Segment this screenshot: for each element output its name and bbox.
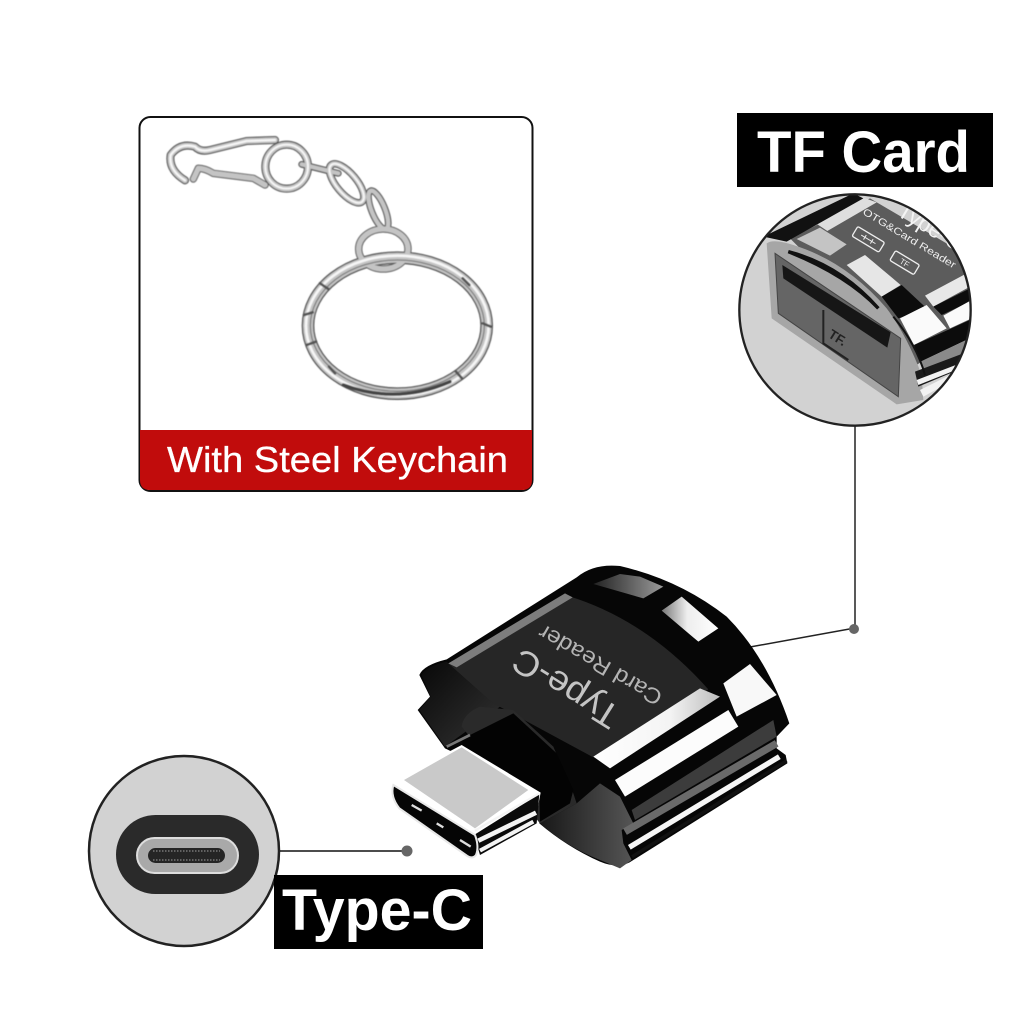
- panel frame: [140, 117, 532, 491]
- port shell: [137, 838, 238, 873]
- callout circle: TF card slot: [739, 193, 983, 426]
- red caption band: [140, 430, 532, 490]
- side panel shade: [632, 720, 777, 820]
- callout circle: TF card slot: OTG&Card Reader: [860, 207, 958, 272]
- reflective stripes: [847, 255, 901, 297]
- label: TF Card: TF Card: [757, 120, 970, 185]
- device: Type-C card reader: [389, 566, 789, 868]
- card slot opening: [782, 265, 891, 348]
- caption: with steel keychain: With Steel Keychain: [167, 439, 508, 480]
- label: Type-C: Type-C: [282, 878, 472, 943]
- panel: steel keychain: [140, 117, 532, 491]
- leader line: TF card: [750, 426, 855, 647]
- connector collar: [447, 707, 577, 823]
- top panel: [448, 596, 708, 757]
- connector stripes: [474, 793, 539, 855]
- icon: keychain: [170, 140, 491, 396]
- text on device: Card Reader: [534, 620, 666, 711]
- left lobe shading: [419, 662, 500, 747]
- gray top reflection: [593, 574, 663, 598]
- top edge gleam: [448, 593, 573, 667]
- lower lobe shading: [540, 783, 633, 868]
- top face: [790, 198, 983, 365]
- mouth pins: [412, 805, 471, 847]
- device body: [418, 566, 789, 865]
- rim around the slot: [767, 241, 923, 404]
- port surround: [116, 815, 259, 894]
- product text: Type-C: [893, 198, 967, 256]
- second white band: [615, 710, 738, 797]
- leader dot: TF card: [849, 624, 859, 634]
- leader line: Type-C: [280, 850, 405, 852]
- connector: silver shell: [389, 745, 541, 859]
- text on device: [506, 620, 666, 736]
- icon: TF badge: [890, 251, 920, 275]
- white reflection right: [723, 664, 777, 717]
- port contacts: [148, 848, 225, 863]
- leader dot: Type-C: [402, 846, 412, 856]
- icon: TF badge: TF: [898, 257, 911, 270]
- text on device: Type-C: [506, 640, 627, 736]
- long white band: [593, 688, 720, 768]
- side rail lines: [625, 743, 787, 857]
- slot plate: [775, 253, 901, 397]
- TF mark: TF.: [826, 326, 849, 349]
- callout circle: Type-C port: [89, 756, 279, 946]
- white reflection: [662, 597, 718, 642]
- connector mouth: [392, 785, 477, 857]
- icon: usb badge: [852, 226, 885, 252]
- TF mark: [823, 310, 849, 360]
- curved shadow above slot: [788, 252, 878, 308]
